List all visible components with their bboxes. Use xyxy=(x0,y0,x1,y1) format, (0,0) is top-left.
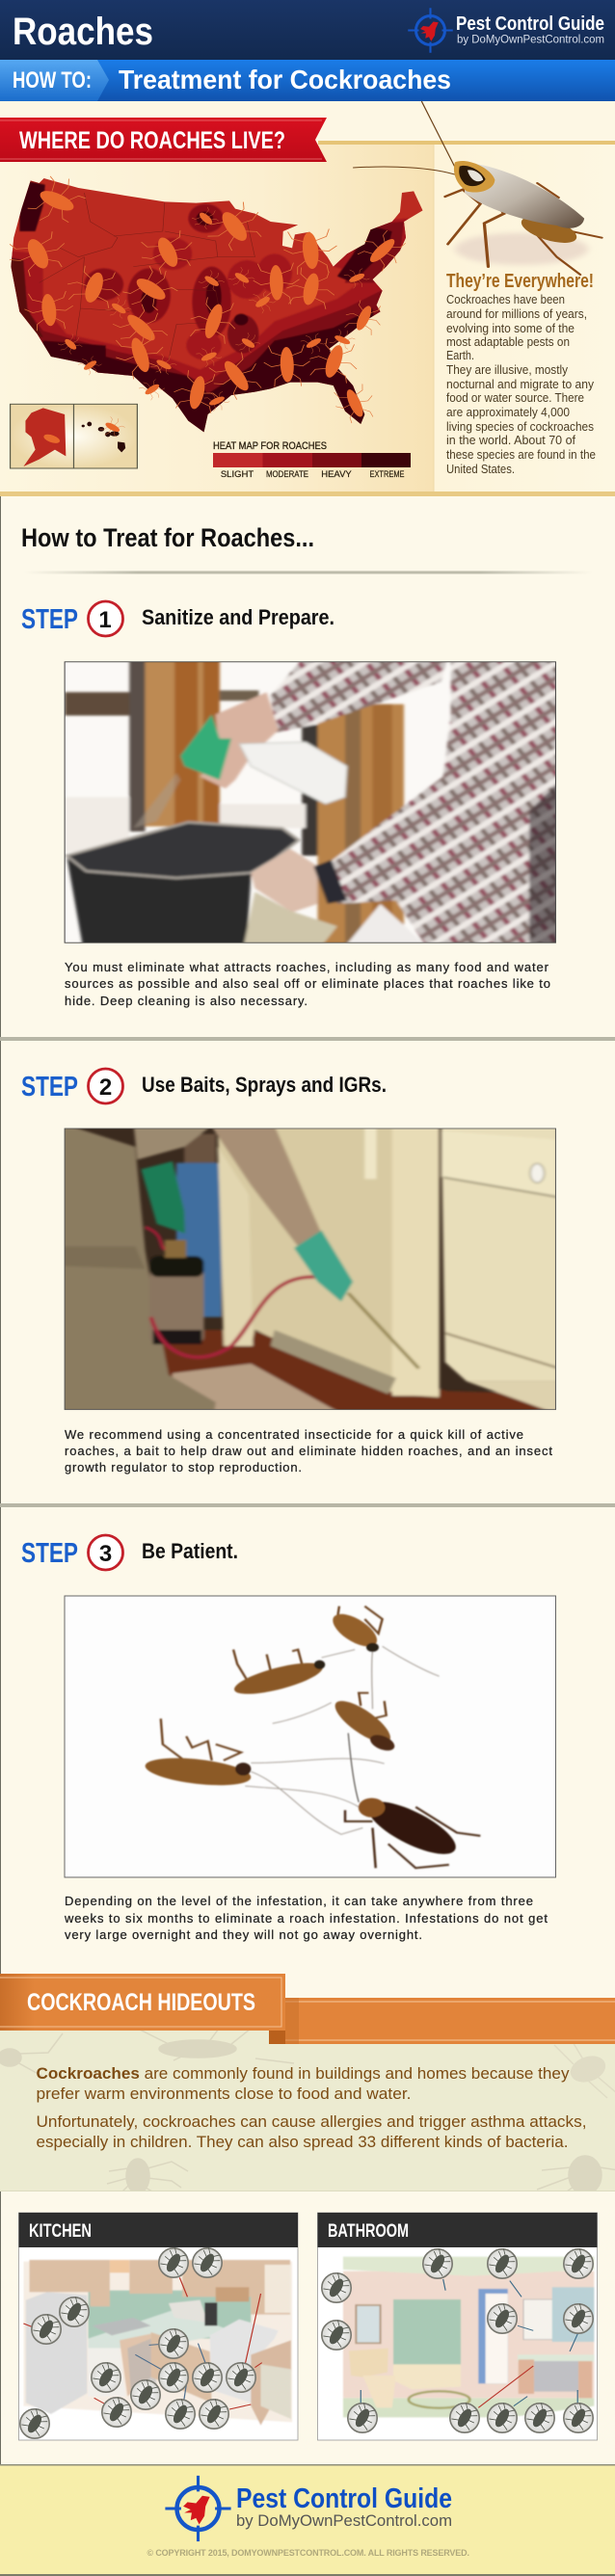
text block: they're everywhere: evolving into some of the xyxy=(446,322,575,335)
step 1 text: You must eliminate what attracts roaches, including as many food and water xyxy=(65,960,549,974)
text block: they're everywhere: Cockroaches have been xyxy=(446,293,565,306)
panel: bathroom xyxy=(318,2213,598,2440)
heat map of the USA xyxy=(4,172,423,434)
text block: they're everywhere: living species of cockroaches xyxy=(446,420,594,434)
inset: Alaska and Hawaii xyxy=(11,404,137,468)
hideouts body text: prefer warm environments close to food and water. xyxy=(37,2085,411,2103)
footer logo: by DoMyOwnPestControl.com xyxy=(236,2511,452,2530)
step 2 text: growth regulator to stop reproduction. xyxy=(65,1460,302,1474)
hideouts body text xyxy=(37,2064,586,2151)
text block: they're everywhere xyxy=(446,271,596,476)
text block: they're everywhere: nocturnal and migrate to any xyxy=(446,378,595,391)
step 3 text xyxy=(64,1894,548,1942)
text block: they're everywhere: most adaptable pests on xyxy=(446,335,570,349)
kitchen hideout markers xyxy=(20,2245,257,2438)
text block: they're everywhere: are approximately 4,000 xyxy=(446,406,570,419)
photo frame xyxy=(65,1596,555,1877)
how-to bar: HOW TO: xyxy=(13,67,92,93)
roach silhouettes xyxy=(0,2020,615,2200)
subtitle: Treatment for Cockroaches xyxy=(119,65,451,94)
logo: Pest Control Guide xyxy=(408,8,604,53)
legend: heat map: MODERATE xyxy=(266,469,308,480)
step 2: STEP xyxy=(21,1072,78,1102)
footer xyxy=(0,2464,615,2576)
photo: treating behind a refrigerator xyxy=(55,1121,565,1417)
step 3 xyxy=(21,1535,238,1570)
step 2 text xyxy=(65,1427,552,1474)
kitchen illustration xyxy=(23,2260,292,2438)
step 1 xyxy=(21,601,334,636)
step 2 text: We recommend using a concentrated insecticide for a quick kill of active xyxy=(65,1427,523,1442)
bathroom illustration xyxy=(343,2257,594,2417)
legend: heat map: HEAT MAP FOR ROACHES xyxy=(213,440,327,452)
title: Roaches: Roaches xyxy=(13,11,153,53)
panel: bathroom: BATHROOM xyxy=(328,2221,409,2242)
header band xyxy=(0,0,615,60)
step 2 text: roaches, a bait to help draw out and eliminate hidden roaches, and an insect xyxy=(65,1444,552,1458)
legend: heat map: SLIGHT xyxy=(221,469,254,480)
text block: they're everywhere: United States. xyxy=(446,463,515,476)
text block: they're everywhere: around for millions of years, xyxy=(446,307,587,321)
step 2 xyxy=(21,1069,387,1103)
text block: they're everywhere: Earth. xyxy=(446,349,474,362)
hideouts body text: especially in children. They can also spread 33 different kinds of bacteria. xyxy=(37,2133,569,2151)
step 3: Be Patient. xyxy=(142,1539,238,1563)
text block: they're everywhere: in the world. About 70 of xyxy=(446,434,576,447)
step 1 text: sources as possible and also seal off or eliminate places that roaches like to xyxy=(65,976,550,991)
step 1: 1 xyxy=(98,607,112,633)
step 3: 3 xyxy=(99,1541,112,1567)
logo: Pest Control Guide: by DoMyOwnPestControl.com xyxy=(457,35,604,46)
footer logo: Pest Control Guide xyxy=(236,2483,452,2514)
step 1: STEP xyxy=(21,604,78,635)
red banner: where do roaches live: WHERE DO ROACHES LIVE? xyxy=(19,127,285,154)
step 1 text xyxy=(65,960,550,1008)
step 2: 2 xyxy=(99,1075,112,1101)
illustration: large cockroach xyxy=(353,101,602,275)
panel: kitchen xyxy=(19,2213,298,2440)
heading: how to treat: How to Treat for Roaches... xyxy=(21,523,314,552)
text block: they're everywhere: They are illusive, mostly xyxy=(446,363,569,377)
step 1: Sanitize and Prepare. xyxy=(142,605,334,629)
panel: cockroach hideouts xyxy=(0,2020,615,2200)
step 3 text: Depending on the level of the infestation, it can take anywhere from three xyxy=(65,1894,533,1908)
orange banner: cockroach hideouts xyxy=(0,1974,615,2044)
text block: they're everywhere: these species are found in the xyxy=(446,448,596,462)
step 3 text: very large overnight and they will not go away overnight. xyxy=(65,1927,422,1942)
step 3: STEP xyxy=(21,1538,78,1569)
legend: heat map: EXTREME xyxy=(370,469,405,480)
step 2: Use Baits, Sprays and IGRs. xyxy=(142,1073,387,1097)
legend: heat map: HEAVY xyxy=(321,469,352,480)
legend: heat map xyxy=(213,440,411,480)
panel: kitchen: KITCHEN xyxy=(29,2221,92,2242)
footer logo xyxy=(165,2476,452,2541)
how-to bar xyxy=(0,60,615,101)
copyright: © COPYRIGHT 2015, DOMYOWNPESTCONTROL.COM. ALL RIGHTS RESERVED. xyxy=(147,2548,469,2558)
left edge line xyxy=(0,496,1,2465)
photo: dead cockroaches xyxy=(65,1596,555,1877)
hideouts body text: Unfortunately, cockroaches can cause allergies and trigger asthma attacks, xyxy=(37,2112,586,2131)
step 3 text: weeks to six months to eliminate a roach infestation. Infestations do not get xyxy=(64,1911,548,1925)
orange banner: cockroach hideouts: COCKROACH HIDEOUTS xyxy=(27,1989,255,2016)
red banner: where do roaches live xyxy=(0,118,327,162)
step 1 text: hide. Deep cleaning is also necessary. xyxy=(65,994,308,1008)
photo: spraying a trash bin xyxy=(65,652,565,952)
hideouts body text: Cockroaches are commonly found in buildings and homes because they xyxy=(37,2064,570,2083)
bathroom hideout markers xyxy=(322,2246,595,2432)
text block: they're everywhere: food or water source. There xyxy=(446,391,584,405)
